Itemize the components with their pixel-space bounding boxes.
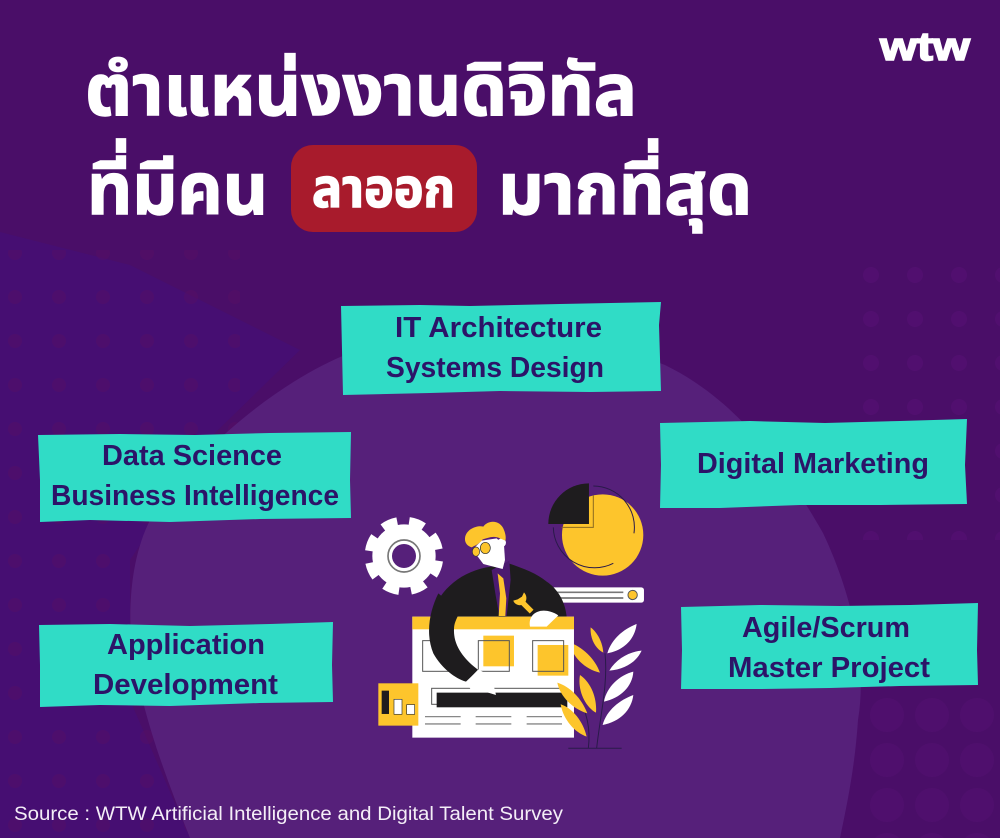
label: Data Science Business Intelligence: Data Science [102,440,282,472]
illustration: worker with dashboard [365,483,644,748]
person: arm, shirt and head [429,522,558,695]
arm [429,593,478,682]
source note: Source : WTW Artificial Intelligence and Digital Talent Survey [14,804,564,825]
plant back [568,624,642,748]
plant front leaves [557,683,587,737]
search bar [549,587,644,603]
wrench [513,592,532,612]
tie [498,573,506,616]
title line 2 start: ที่มีคน [87,139,268,230]
icon: pie chart [548,483,643,576]
label: Application Development: Development [93,669,279,701]
label: Application Development [39,622,333,707]
label: IT Architecture Systems Design [341,302,661,395]
label: Application Development: Application [107,629,265,661]
logo: wtw: wtw [879,25,971,69]
dashboard window [412,617,574,738]
title [85,51,752,233]
label: Agile/Scrum Master Project [681,603,978,689]
hair [465,522,506,547]
label: Agile/Scrum Master Project: Agile/Scrum [742,612,910,644]
label: Digital Marketing: Digital Marketing [697,448,929,480]
label: Data Science Business Intelligence: Business Intelligence [51,480,339,512]
label: Agile/Scrum Master Project: Master Project [728,652,931,684]
icon: gear [365,517,443,595]
lower hand [467,669,496,695]
title line 1: ตำแหน่งงานดิจิทัล [85,51,637,131]
neck and face [473,538,505,569]
glasses [480,542,490,554]
label: Data Science Business Intelligence [38,432,351,522]
highlight pill: ลาออก [312,159,455,219]
highlight pill [291,145,477,232]
label: IT Architecture Systems Design: IT Architecture [395,312,602,344]
label: Digital Marketing [660,419,967,508]
icon: mini bar chart [378,683,418,726]
upper hand [530,611,558,627]
title line 2 end: มากที่สุด [498,139,752,233]
person torso [430,563,567,637]
shirt [492,561,511,616]
label: IT Architecture Systems Design: Systems Design [386,352,604,384]
ear [497,538,506,547]
